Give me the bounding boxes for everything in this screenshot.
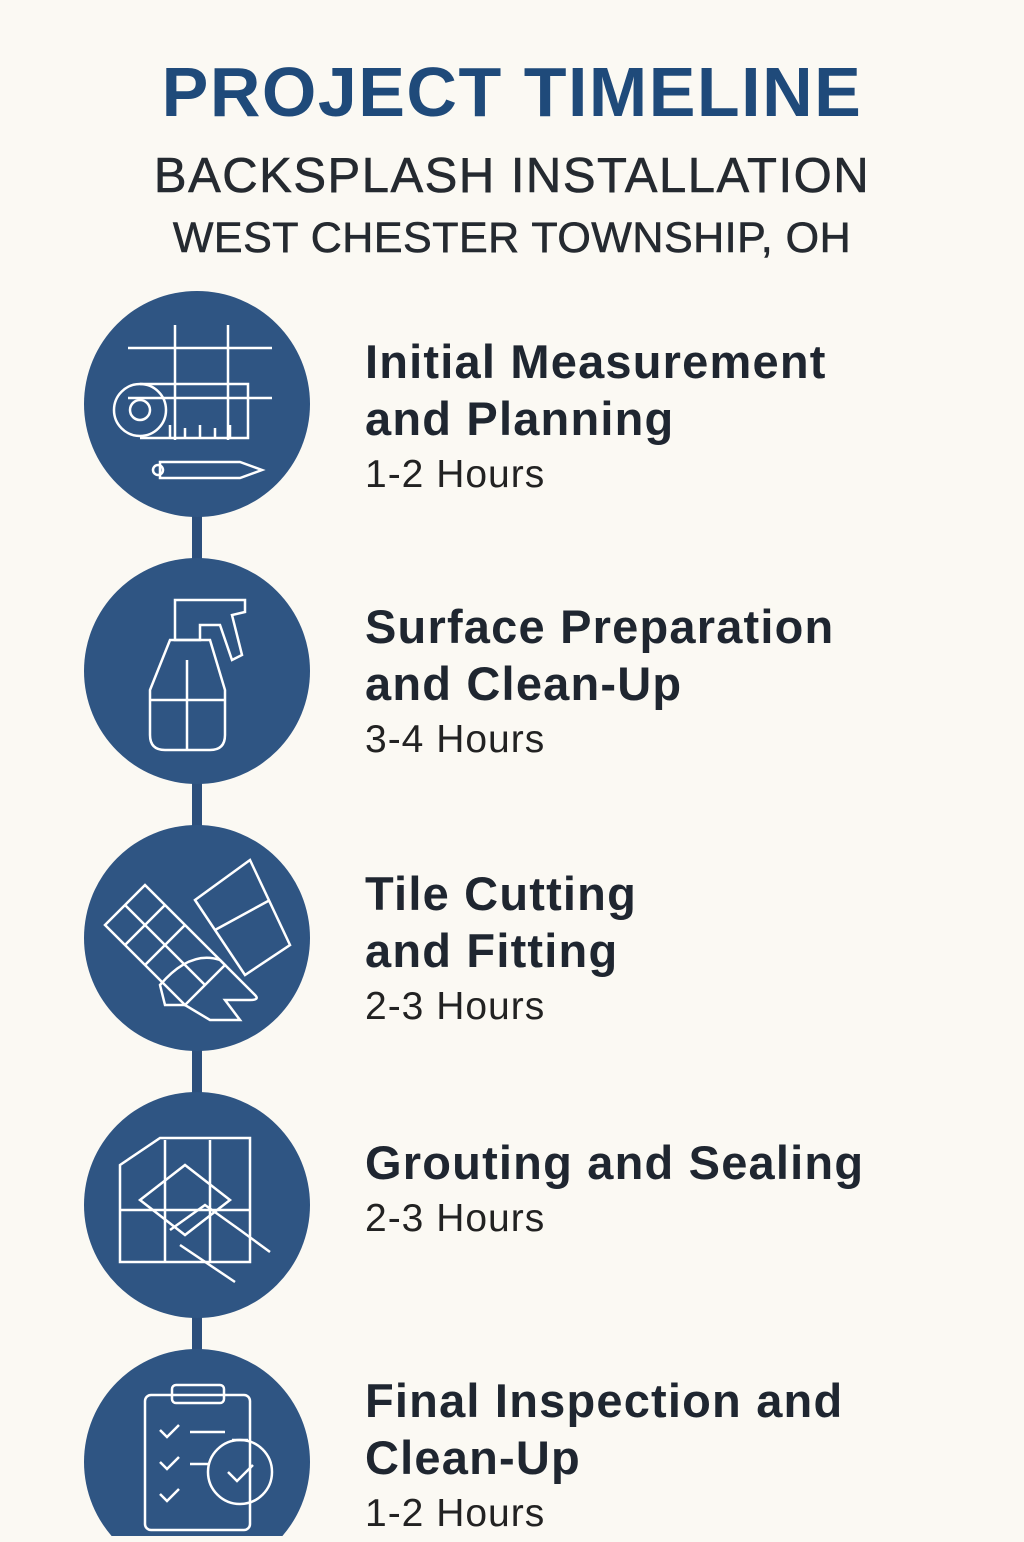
step 1: and Planning xyxy=(365,392,674,445)
step 5: Clean-Up xyxy=(365,1431,581,1484)
title: PROJECT TIMELINE xyxy=(162,53,862,131)
step 2: Surface Preparation xyxy=(365,600,834,653)
timeline icons xyxy=(84,291,310,1536)
step 2: and Clean-Up xyxy=(365,657,682,710)
icon: spray bottle xyxy=(84,558,310,784)
step 1: 1-2 Hours xyxy=(365,453,545,496)
icon: tile cutting xyxy=(84,825,310,1051)
location: WEST CHESTER TOWNSHIP, OH xyxy=(173,214,851,262)
step 3: 2-3 Hours xyxy=(365,985,545,1028)
step 4: Grouting and Sealing xyxy=(365,1136,864,1189)
step 1: Initial Measurement xyxy=(365,335,827,388)
step 1 xyxy=(365,335,827,496)
step 2 xyxy=(365,600,834,761)
step 3 xyxy=(365,867,637,1028)
step 5: Final Inspection and xyxy=(365,1374,843,1427)
step 2: 3-4 Hours xyxy=(365,718,545,761)
icon: measurement xyxy=(84,291,310,517)
step 4: 2-3 Hours xyxy=(365,1197,545,1240)
icon: clipboard xyxy=(84,1349,310,1542)
step 4 xyxy=(365,1136,864,1240)
step 3: Tile Cutting xyxy=(365,867,637,920)
subtitle: BACKSPLASH INSTALLATION xyxy=(154,149,870,203)
icon: grouting xyxy=(84,1092,310,1318)
step 5: 1-2 Hours xyxy=(365,1492,545,1535)
step 5 xyxy=(365,1374,843,1535)
step 3: and Fitting xyxy=(365,924,618,977)
